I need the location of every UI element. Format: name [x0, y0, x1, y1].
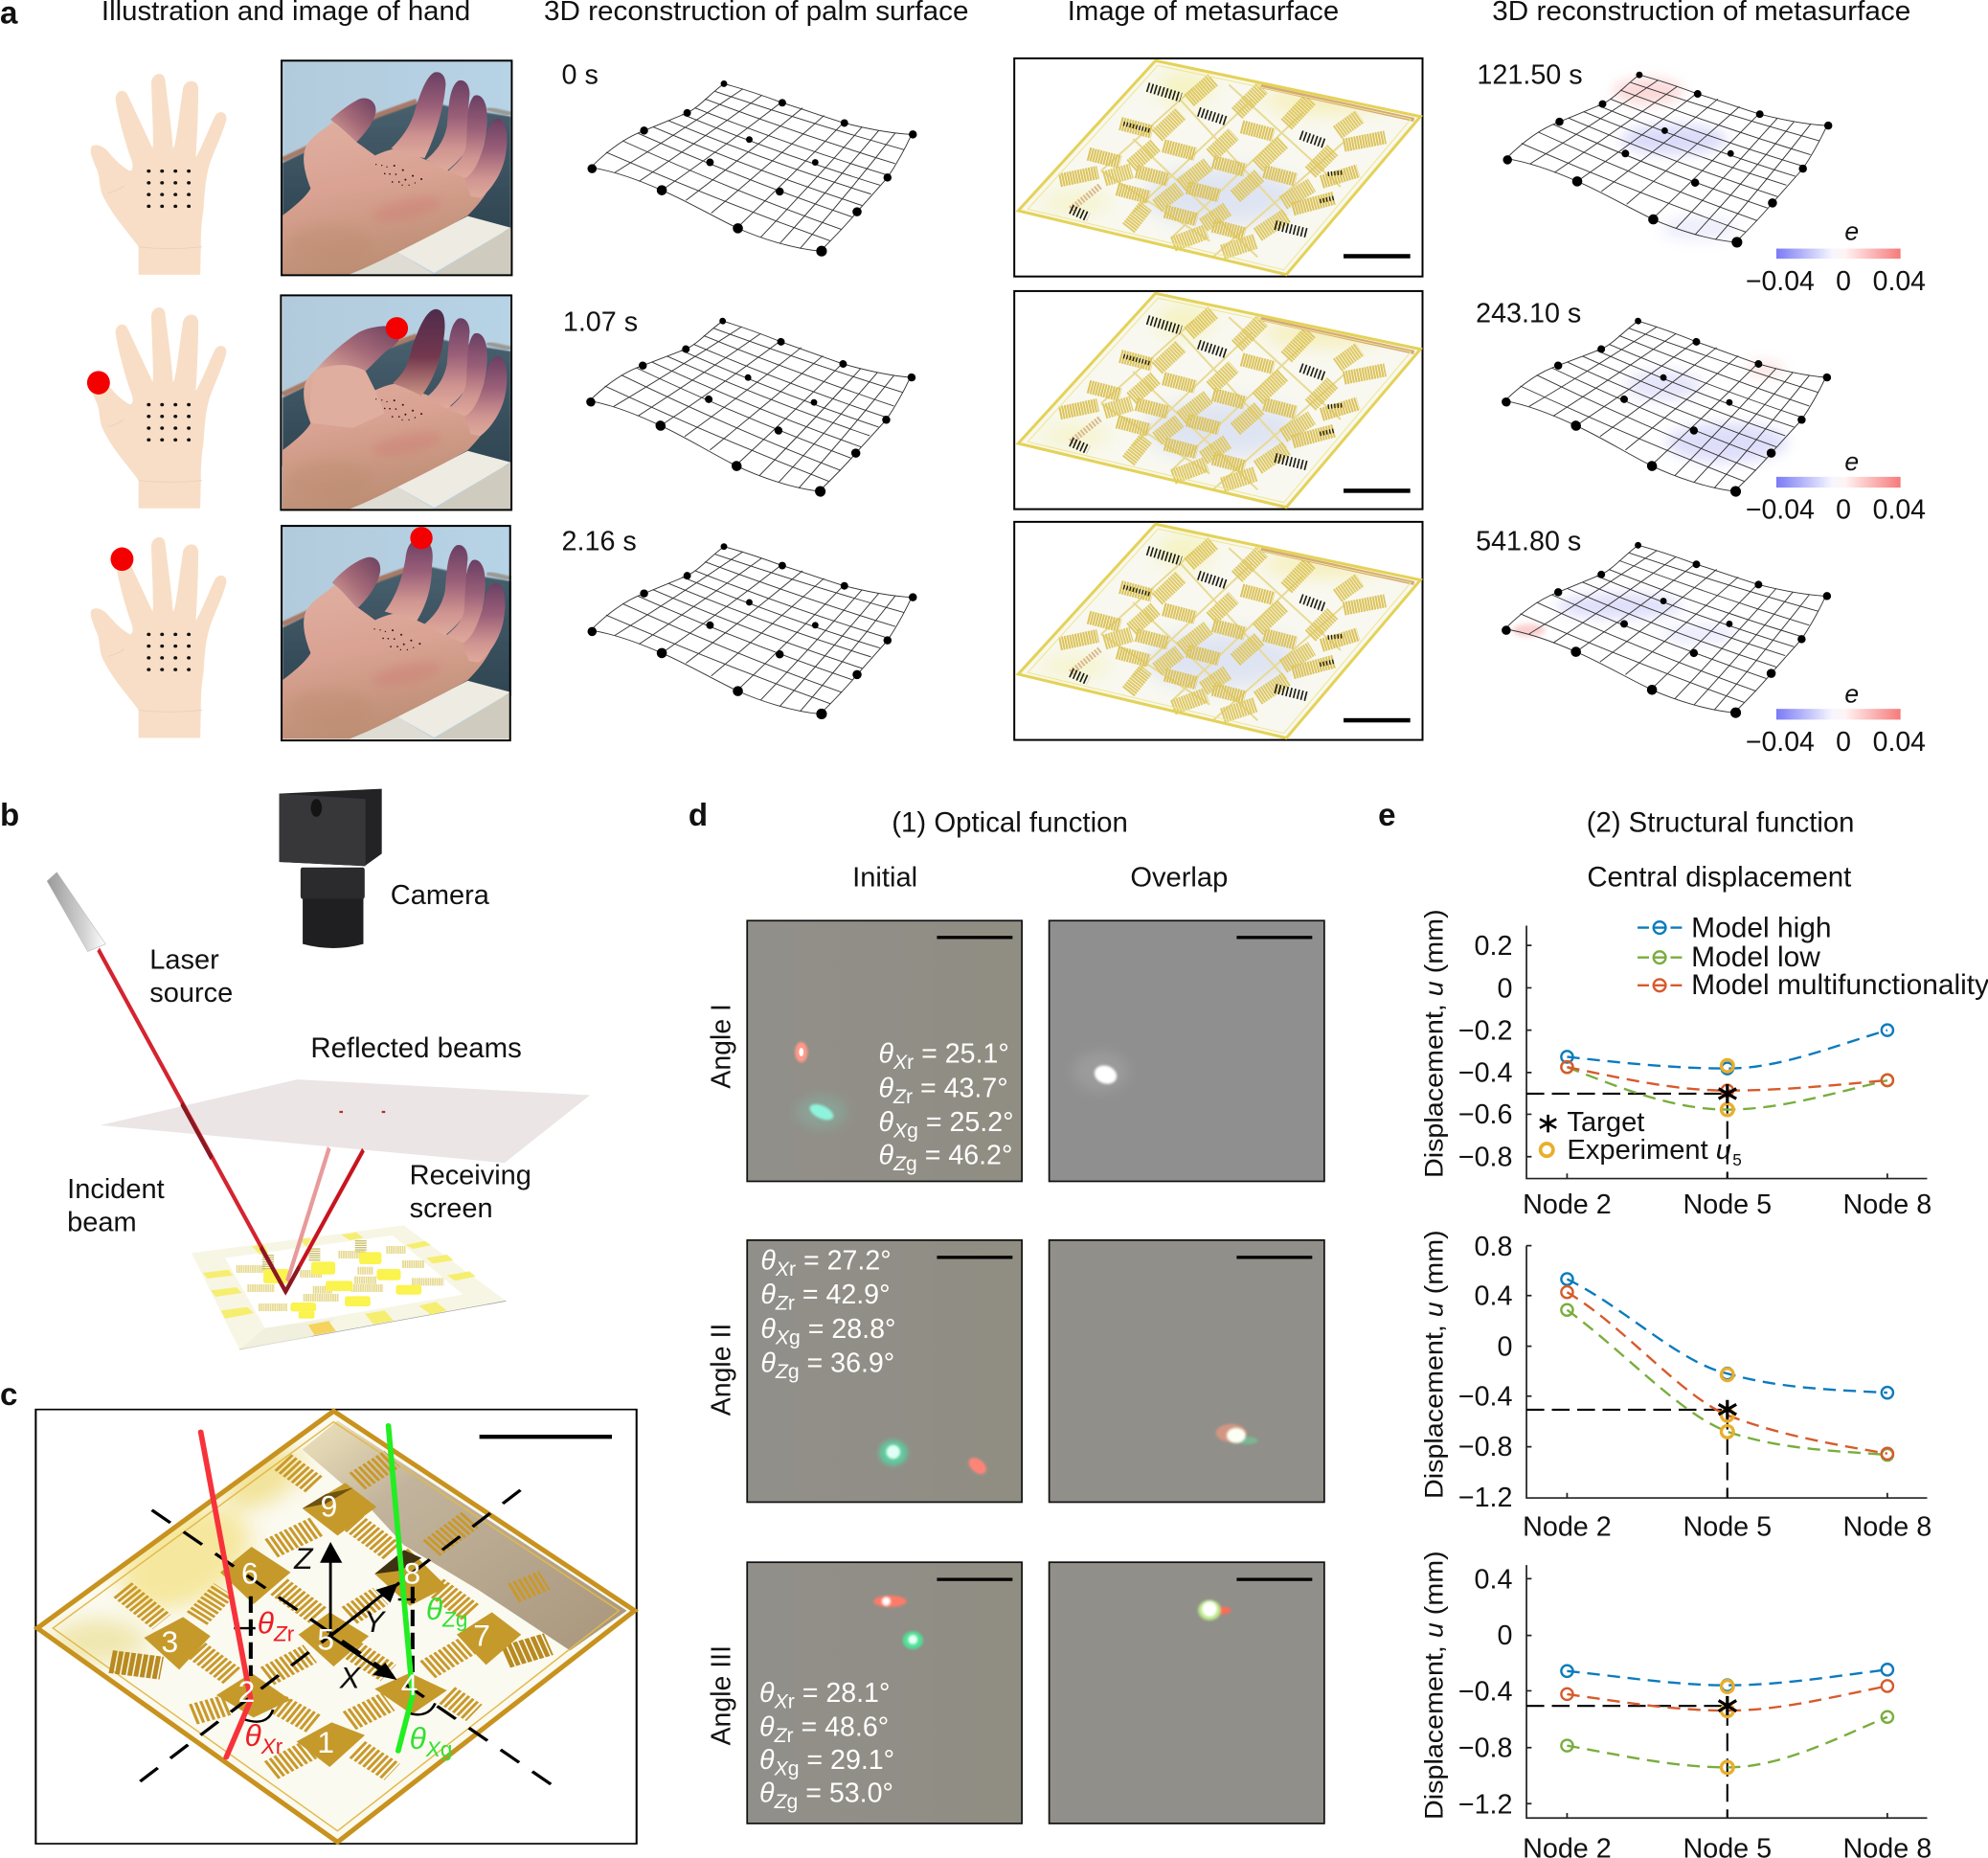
photo: index finger moved with red marker [282, 526, 510, 740]
illustration: hand at rest [91, 74, 226, 275]
illustration: hand with thumb marked [87, 307, 226, 509]
image: angle II initial: θ [760, 1348, 776, 1379]
arrow: Z [320, 1542, 342, 1636]
chart: displacement angle II [1420, 1230, 1932, 1542]
image: angle I initial: Z [892, 1086, 907, 1108]
chart: displacement angle I: Node 8 [1843, 1190, 1932, 1220]
image: angle II initial: X [775, 1326, 790, 1348]
scale bar [480, 1435, 612, 1439]
target lines [1526, 1410, 1728, 1498]
image: angle III initial: Z [774, 1725, 788, 1747]
metasurface sample [192, 1225, 506, 1349]
incident beam [99, 949, 285, 1291]
angle labels: Z [441, 1608, 457, 1632]
y axis label: Displacement, u (mm) [1420, 1230, 1449, 1499]
heading: structural function: (2) Structural function [1587, 808, 1854, 839]
series: model high [1561, 1273, 1893, 1398]
tick labels [1458, 1564, 1513, 1820]
image: angle I initial: X [892, 1052, 908, 1074]
time label: 1.07 s [563, 307, 638, 338]
mesh: metasurface at 541.80 s [1502, 542, 1831, 718]
image: angle I initial: = 46.2° [917, 1140, 1012, 1170]
time label: 0 s [562, 59, 599, 90]
tick labels: 0.4 [1475, 1280, 1513, 1311]
panel b: experimental setup [47, 789, 590, 1349]
image: angle III initial: θ [759, 1745, 775, 1776]
label: incident beam: beam [67, 1208, 137, 1238]
mesh: metasurface at 121.50 s [1502, 72, 1832, 247]
red beam [201, 1432, 251, 1757]
image: angle I initial: θ [879, 1039, 894, 1070]
colour bar row 2: 0 [1836, 495, 1851, 526]
node numbers: 3 [162, 1624, 178, 1659]
colour bar row 1: 0.04 [1873, 266, 1926, 297]
colour bar row 2: −0.04 [1746, 495, 1815, 526]
tick labels: −0.8 [1458, 1733, 1513, 1763]
image: angle II initial [747, 1240, 1022, 1502]
legend: Target [1567, 1107, 1644, 1138]
chart: displacement angle I: Node 2 [1523, 1190, 1612, 1220]
image: angle III initial: = 28.1° [795, 1678, 890, 1709]
series: model low [1561, 1061, 1893, 1116]
axis labels: Z [293, 1541, 314, 1575]
chart: displacement angle I: Node 5 [1683, 1190, 1772, 1220]
beam crossing screen [182, 1103, 300, 1291]
angle labels [245, 1592, 467, 1761]
y axis label: Displacement, u (mm) [1420, 909, 1449, 1178]
label: camera: Camera [391, 880, 490, 911]
series: model low [1561, 1711, 1893, 1774]
row label: angle III: Angle III [707, 1645, 737, 1745]
arrow: Y [330, 1583, 398, 1636]
tick labels: −0.6 [1458, 1099, 1513, 1130]
legend [1540, 912, 1988, 1169]
colour bar row 3 [1746, 680, 1926, 758]
image: angle III initial: θ [759, 1678, 775, 1709]
image: angle I initial [747, 920, 1022, 1181]
image: angle III initial: = 48.6° [794, 1712, 889, 1743]
heading: optical function: (1) Optical function [892, 807, 1128, 839]
image: angle II initial: = 36.9° [800, 1348, 894, 1379]
column heading: overlap: Overlap [1130, 863, 1228, 894]
image: angle II initial: Z [775, 1293, 789, 1315]
node numbers: 5 [317, 1622, 334, 1657]
label: reflected beams: Reflected beams [310, 1032, 522, 1064]
tick labels: 0.4 [1475, 1564, 1513, 1595]
mesh: palm surface at 1.07 s [586, 313, 915, 500]
receiving screen [101, 1079, 590, 1163]
axis labels: Y [364, 1604, 387, 1639]
panel: metasurface reconstructions [1476, 59, 1926, 758]
tick labels: 0.2 [1475, 931, 1513, 962]
node numbers: 4 [401, 1667, 418, 1702]
angle labels: g [441, 1737, 452, 1761]
node numbers [162, 1489, 490, 1759]
angle labels: X [260, 1734, 277, 1758]
chart: displacement angle II: Node 2 [1523, 1511, 1612, 1542]
image: angle II initial: θ [760, 1314, 776, 1345]
reflected beam [285, 1150, 363, 1291]
image: angle II initial: θ [760, 1245, 776, 1276]
tick labels: 0.8 [1475, 1232, 1513, 1262]
legend: Experiment u [1567, 1135, 1731, 1166]
angle labels: X [425, 1737, 441, 1761]
tick labels: −0.4 [1458, 1382, 1513, 1413]
chart: displacement angle III [1420, 1551, 1932, 1858]
image: angle II initial: g [789, 1326, 801, 1348]
image: angle I initial: θ [879, 1140, 894, 1170]
reflected beam faint [287, 1147, 329, 1281]
image: angle II initial: r [788, 1293, 795, 1315]
image: angle II initial: = 27.2° [796, 1245, 892, 1276]
node numbers: 6 [241, 1556, 259, 1591]
target marker [1719, 1400, 1736, 1419]
metasurface body [37, 1411, 635, 1842]
series: model low [1561, 1304, 1893, 1461]
node numbers: 9 [321, 1489, 337, 1524]
label: receiving screen: screen [410, 1193, 493, 1224]
legend: 5 [1732, 1150, 1742, 1169]
image: angle III initial: r [787, 1725, 794, 1747]
arrow: X [330, 1636, 397, 1680]
experiment points [1721, 1681, 1733, 1774]
axes [1526, 1565, 1927, 1818]
colour bar row 3: 0.04 [1873, 727, 1926, 758]
mesh: metasurface at 243.10 s [1502, 313, 1831, 500]
tick labels: −0.8 [1458, 1432, 1513, 1462]
chart: displacement angle II: Node 8 [1843, 1511, 1932, 1542]
colour bar row 3: −0.04 [1746, 727, 1815, 758]
frame [35, 1410, 637, 1844]
time label: 2.16 s [562, 527, 637, 557]
panel: hand illustrations [87, 74, 226, 738]
colour bar row 1 [1746, 216, 1926, 297]
experiment points [1721, 1369, 1733, 1438]
image: angle III initial: g [788, 1758, 799, 1780]
axis labels: X [339, 1660, 362, 1694]
chart: displacement angle II: Node 5 [1683, 1511, 1772, 1542]
angle labels: θ [410, 1721, 426, 1756]
image: angle I initial: = 25.1° [914, 1039, 1009, 1070]
tick labels: −0.4 [1458, 1677, 1513, 1708]
image: angle III initial: X [774, 1758, 789, 1780]
panel b label: b [0, 798, 19, 833]
image: angle I initial: θ [879, 1073, 894, 1103]
label: laser source: source [149, 978, 233, 1008]
colour bar row 2: 0.04 [1873, 495, 1926, 526]
row label: angle I: Angle I [707, 1004, 737, 1089]
dashed axes [140, 1482, 558, 1789]
image: angle III initial: = 53.0° [798, 1778, 893, 1808]
image: angle I initial: r [907, 1052, 914, 1074]
image: angle II initial: X [775, 1258, 790, 1280]
label: laser source: Laser [149, 945, 219, 976]
tick labels: −0.8 [1458, 1142, 1513, 1172]
angle labels: r [276, 1734, 283, 1758]
tick labels: −0.2 [1458, 1016, 1513, 1047]
panel d label: d [689, 798, 708, 833]
image: angle II initial: g [788, 1361, 800, 1383]
series: model multifunctionality [1561, 1061, 1893, 1097]
node numbers: 1 [317, 1725, 334, 1759]
legend: Model low [1691, 941, 1820, 973]
icon: laser source [47, 872, 105, 952]
image: angle I initial: g [907, 1121, 918, 1143]
image: angle I initial: g [906, 1153, 917, 1175]
image: angle I overlap [1050, 920, 1324, 1181]
angle labels: r [287, 1621, 295, 1645]
panel: metasurface images [1014, 58, 1423, 740]
tick labels: 0 [1498, 1620, 1513, 1651]
tick labels [1458, 1232, 1513, 1513]
image: angle III initial: θ [759, 1778, 775, 1808]
subheading: central displacement: Central displacement [1587, 862, 1851, 894]
image: angle II initial: = 42.9° [795, 1280, 891, 1310]
image: angle I initial: r [906, 1086, 913, 1108]
angle labels: θ [245, 1718, 261, 1753]
image: angle III initial: g [787, 1791, 798, 1813]
tick labels: 0 [1498, 973, 1513, 1004]
series: model multifunctionality [1561, 1680, 1893, 1716]
tick labels: −1.2 [1458, 1483, 1513, 1513]
image: angle I initial: = 25.2° [918, 1107, 1014, 1138]
image: angle III initial: X [774, 1690, 789, 1712]
label: incident beam: Incident [67, 1174, 165, 1205]
axes [1526, 1246, 1927, 1498]
angle labels: θ [426, 1592, 442, 1626]
tick labels [1458, 931, 1513, 1172]
photo: metasurface row 2 [1014, 291, 1423, 510]
image: angle II initial: Z [775, 1361, 789, 1383]
panel c: metasurface with beams [35, 1410, 637, 1844]
image: angle III initial: r [788, 1690, 795, 1712]
colour bar row 1: e [1844, 216, 1859, 245]
experiment points [1721, 1059, 1733, 1116]
image: angle III initial [747, 1562, 1022, 1824]
image: angle II overlap [1050, 1240, 1324, 1502]
legend: Model high [1691, 912, 1832, 943]
mesh: palm surface at 2.16 s [588, 543, 917, 719]
image: angle I initial: θ [879, 1107, 894, 1138]
angle labels: Z [273, 1621, 288, 1645]
node numbers: 7 [473, 1619, 490, 1653]
image: angle II initial: θ [760, 1280, 776, 1310]
node numbers: 2 [238, 1674, 255, 1709]
axis labels [293, 1541, 387, 1694]
series: model multifunctionality [1561, 1286, 1893, 1460]
image: angle II initial: r [789, 1258, 796, 1280]
panel: hand photographs [281, 60, 511, 740]
series: model high [1561, 1664, 1893, 1691]
image: angle III initial: θ [759, 1712, 775, 1743]
target marker [1719, 1696, 1736, 1715]
time label: 243.10 s [1476, 298, 1581, 329]
panel c label: c [0, 1377, 17, 1413]
spots on screen [339, 1111, 385, 1113]
angle labels: θ [258, 1605, 274, 1640]
time label: 121.50 s [1477, 59, 1583, 90]
target lines [1526, 1706, 1728, 1817]
target lines [1526, 1094, 1728, 1178]
illustration: hand with index finger marked [91, 537, 226, 738]
photo: metasurface row 1 [1014, 58, 1423, 277]
angle arcs [244, 1703, 436, 1722]
label: receiving screen: Receiving [410, 1161, 531, 1191]
column heading: initial: Initial [852, 863, 917, 894]
image: angle I initial: X [892, 1121, 908, 1143]
legend: Model multifunctionality [1691, 969, 1988, 1001]
chart: displacement angle I [1420, 909, 1988, 1220]
time label: 541.80 s [1476, 527, 1581, 557]
image: angle I initial: = 43.7° [913, 1073, 1008, 1103]
colour bar row 1: 0 [1836, 266, 1851, 297]
tick labels: 0 [1498, 1331, 1513, 1362]
colour bar row 1: −0.04 [1746, 266, 1815, 297]
image: angle I initial: Z [892, 1153, 907, 1175]
angle labels: g [456, 1608, 467, 1632]
image: angle III overlap [1050, 1562, 1324, 1824]
tick labels: −1.2 [1458, 1789, 1513, 1820]
icon: camera [280, 789, 382, 948]
target marker [1719, 1084, 1736, 1103]
image: angle II initial: = 28.8° [801, 1314, 895, 1345]
photo: thumb moved with red marker [281, 295, 511, 510]
colour bar row 2 [1746, 447, 1926, 526]
photo: metasurface row 3 [1014, 522, 1423, 740]
panel e label: e [1378, 798, 1396, 833]
image: angle III initial: Z [774, 1791, 788, 1813]
axes [1526, 926, 1927, 1179]
colour bar row 3: 0 [1836, 727, 1851, 758]
image: angle III initial: = 29.1° [799, 1745, 894, 1776]
photo: hand at rest [282, 60, 511, 275]
colour bar row 2: e [1844, 447, 1859, 476]
node numbers: 8 [403, 1556, 420, 1591]
mesh: palm surface at 0 s [588, 80, 917, 257]
y axis label: Displacement, u (mm) [1420, 1551, 1449, 1820]
tick labels: −0.4 [1458, 1057, 1513, 1088]
colour bar row 3: e [1844, 680, 1859, 709]
row label: angle II: Angle II [707, 1324, 737, 1416]
series: model high [1561, 1025, 1893, 1075]
green beam [389, 1425, 413, 1751]
panel: palm surface reconstructions [562, 59, 917, 719]
